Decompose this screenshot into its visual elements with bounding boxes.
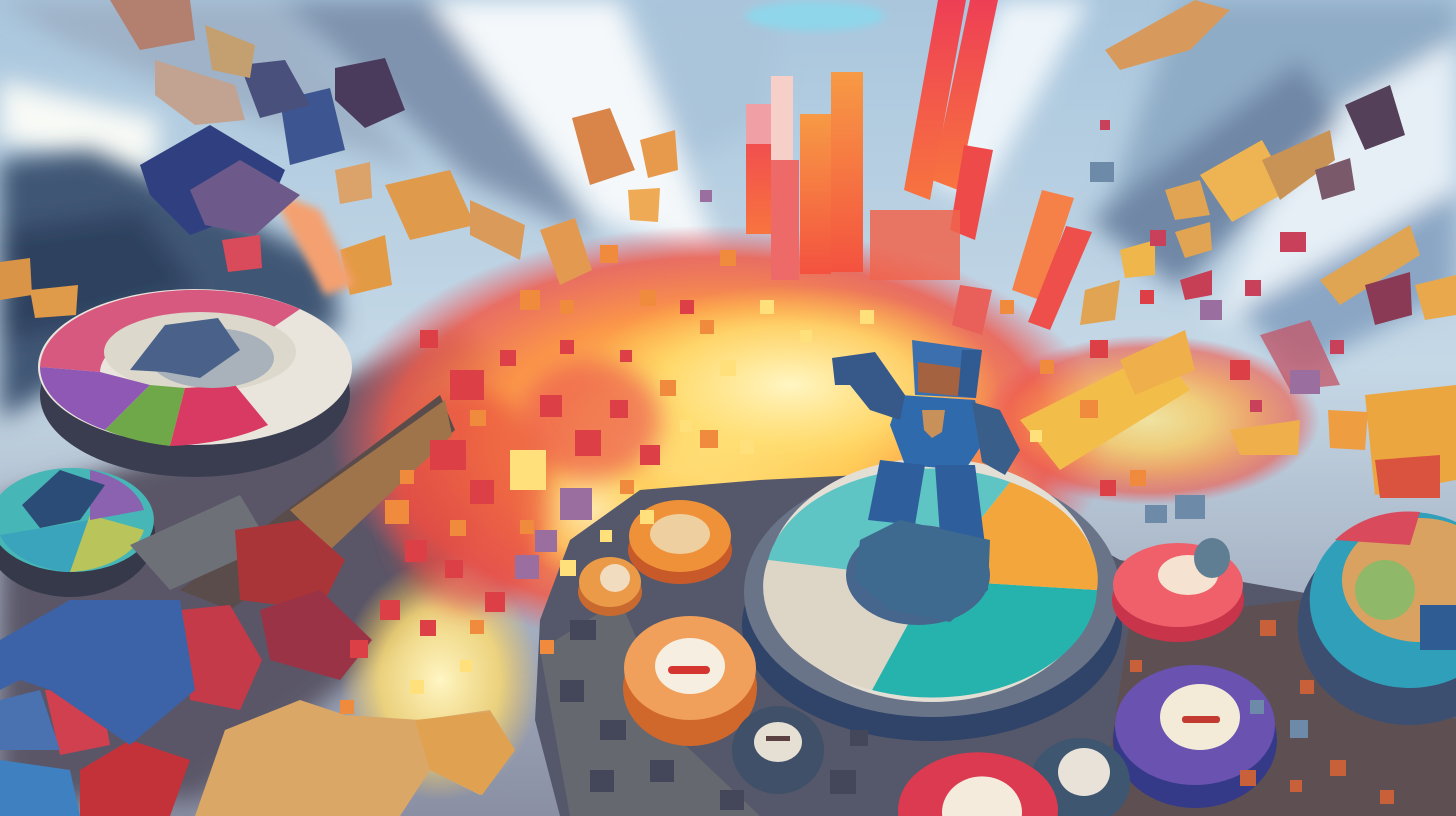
- pink and violet fragments: [515, 190, 1320, 579]
- scattered particles: [340, 120, 1394, 810]
- button: small orange: [578, 557, 642, 616]
- button: dark dial: [732, 706, 824, 794]
- grey-blue fragments near the buttons: [1090, 162, 1308, 738]
- robot legs: [868, 460, 925, 525]
- dark stone texture on the base: [560, 620, 868, 810]
- button: purple with minus sign: [1113, 665, 1277, 808]
- cyan glow at the top: [745, 1, 885, 31]
- button: coral, right of the dial: [1112, 538, 1244, 642]
- red fragments in the blast: [350, 290, 1250, 658]
- robot lowered arm: [972, 402, 1020, 475]
- button: orange top: [628, 500, 732, 584]
- robot raised arm: [832, 352, 905, 420]
- foreground tan block: [195, 700, 515, 816]
- orange fragments in the blast: [340, 245, 1146, 714]
- warm fragments on the lower right ground: [1130, 620, 1394, 804]
- dark cube terrain, upper left: [0, 150, 560, 800]
- robot head: [912, 340, 982, 398]
- button: red, bottom: [898, 752, 1058, 816]
- robot torso: [890, 395, 985, 470]
- robot shield emblem: [922, 410, 945, 438]
- donut chart disc, upper left: [38, 289, 352, 477]
- bar chart: rising orange and pink bars: [746, 0, 1092, 335]
- central teal and orange dial platform: [742, 458, 1122, 741]
- sky streaks radiating from the blast: [0, 0, 1456, 370]
- small disc, lower left: [0, 468, 155, 597]
- blue cubes, lower left: [0, 600, 195, 816]
- floating cubes, upper left: [0, 0, 405, 318]
- crimson fragments on the right: [1100, 120, 1344, 412]
- robot figure: [832, 340, 1020, 622]
- stone base platform: [535, 470, 1456, 816]
- red cubes, lower left: [45, 520, 372, 816]
- floating tan blocks and cubes, upper centre: [222, 108, 678, 295]
- explosion glow: [330, 225, 1320, 800]
- floating tan blocks, right: [1020, 0, 1456, 498]
- button: dark dial, lower right: [1030, 738, 1130, 816]
- button: orange with minus sign: [623, 616, 757, 746]
- yellow fragments in the blast: [410, 300, 1042, 694]
- teal disc, right edge: [1298, 511, 1456, 725]
- robot pedestal: [855, 520, 990, 622]
- dark tray and stone blocks, left of centre: [130, 395, 455, 610]
